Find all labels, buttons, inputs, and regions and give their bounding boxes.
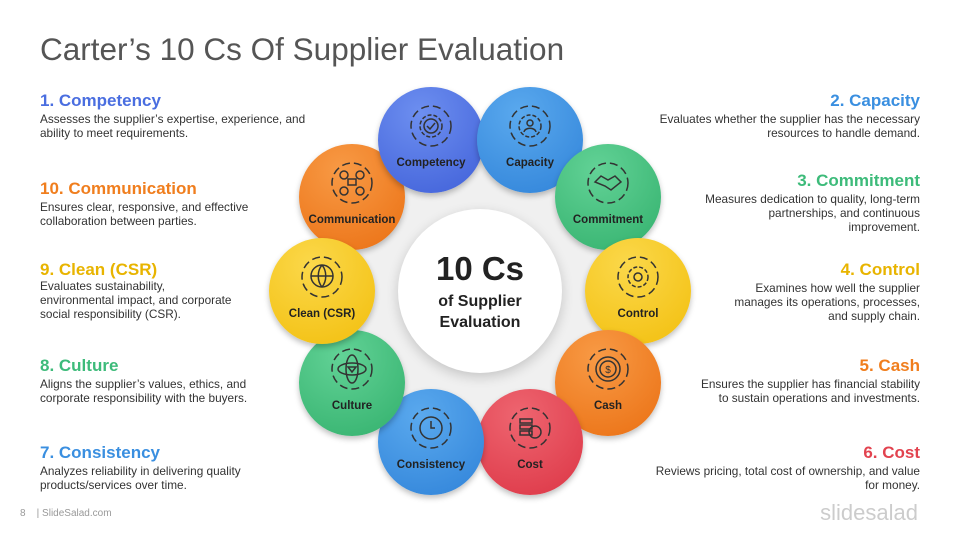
text: competency: 1. Competency bbox=[40, 91, 161, 110]
text: consistency: products/services over time. bbox=[40, 478, 187, 492]
text: control: manages its operations, processes, bbox=[734, 295, 920, 309]
center circle bbox=[398, 209, 562, 373]
text: communication: 10. Communication bbox=[40, 179, 197, 198]
text: commitment: 3. Commitment bbox=[797, 171, 920, 190]
circle: consistency bbox=[378, 389, 484, 495]
text: culture bbox=[40, 356, 247, 405]
text: cash: Ensures the supplier has financial stability bbox=[701, 377, 920, 391]
text: cash: 5. Cash bbox=[860, 356, 920, 375]
title: Carter’s 10 Cs Of Supplier Evaluation bbox=[40, 31, 564, 67]
text: cost: 6. Cost bbox=[863, 443, 920, 462]
circle: capacity: Capacity bbox=[506, 157, 554, 169]
text: clean: environmental impact, and corporate bbox=[40, 293, 231, 307]
circle: commitment bbox=[555, 144, 661, 250]
text: cash bbox=[701, 356, 920, 405]
text: cost: Reviews pricing, total cost of ownership, and value bbox=[656, 464, 920, 478]
text: culture: Aligns the supplier’s values, ethics, and bbox=[40, 377, 246, 391]
circle: cash: $ bbox=[605, 365, 611, 376]
circle: culture bbox=[299, 330, 405, 436]
text: communication: collaboration between parties. bbox=[40, 214, 197, 228]
text: culture: 8. Culture bbox=[40, 356, 118, 375]
circle: control bbox=[585, 238, 691, 344]
text: control bbox=[734, 260, 920, 323]
text: control: 4. Control bbox=[841, 260, 920, 279]
text: commitment: improvement. bbox=[849, 220, 920, 234]
text: communication: Ensures clear, responsive, and effective bbox=[40, 200, 248, 214]
text: competency bbox=[40, 91, 305, 140]
circle: culture: Culture bbox=[332, 400, 372, 412]
text: clean: 9. Clean (CSR) bbox=[40, 260, 157, 279]
text: clean: Evaluates sustainability, bbox=[40, 279, 165, 293]
circle: cost bbox=[477, 389, 583, 495]
text: consistency: 7. Consistency bbox=[40, 443, 160, 462]
background disc bbox=[315, 126, 645, 456]
circle: consistency: Consistency bbox=[397, 459, 465, 471]
circle: communication: Communication bbox=[309, 214, 395, 226]
text: commitment: Measures dedication to quality, long-term bbox=[705, 192, 920, 206]
text: capacity: Evaluates whether the supplier has the necessary bbox=[660, 112, 920, 126]
circle: communication bbox=[299, 144, 405, 250]
text: control: and supply chain. bbox=[828, 309, 920, 323]
text: commitment: partnerships, and continuous bbox=[768, 206, 920, 220]
circle: competency bbox=[378, 87, 484, 193]
circle: cost: Cost bbox=[517, 459, 543, 471]
text: cost bbox=[656, 443, 920, 492]
footer: 8 | SlideSalad.com bbox=[20, 508, 112, 519]
text: capacity: 2. Capacity bbox=[830, 91, 920, 110]
circle: competency: Competency bbox=[396, 157, 466, 169]
text: competency: ability to meet requirements. bbox=[40, 126, 188, 140]
text: capacity: resources to handle demand. bbox=[767, 126, 920, 140]
text: communication bbox=[40, 179, 248, 228]
text: capacity bbox=[660, 91, 920, 140]
text: consistency: Analyzes reliability in delivering quality bbox=[40, 464, 241, 478]
text: control: Examines how well the supplier bbox=[755, 281, 920, 295]
logo: slidesalad bbox=[820, 500, 918, 525]
text: clean bbox=[40, 260, 231, 321]
text: competency: Assesses the supplier’s expertise, experience, and bbox=[40, 112, 305, 126]
circle: clean: Clean (CSR) bbox=[289, 308, 355, 320]
circle: clean bbox=[269, 238, 375, 344]
center circle: Evaluation bbox=[440, 314, 520, 331]
circle: cash bbox=[555, 330, 661, 436]
text: consistency bbox=[40, 443, 241, 492]
text: cost: for money. bbox=[865, 478, 920, 492]
text: cash: to sustain operations and investments. bbox=[719, 391, 920, 405]
circle: control: Control bbox=[618, 308, 658, 320]
diagram bbox=[266, 87, 694, 501]
text: culture: corporate responsibility with the buyers. bbox=[40, 391, 247, 405]
circle: commitment: Commitment bbox=[573, 214, 643, 226]
text: clean: social responsibility (CSR). bbox=[40, 307, 181, 321]
center circle: of Supplier bbox=[438, 293, 522, 310]
circle: cash: Cash bbox=[594, 400, 622, 412]
circle: capacity bbox=[477, 87, 583, 193]
center circle: 10 Cs bbox=[436, 250, 524, 287]
text: commitment bbox=[705, 171, 920, 234]
